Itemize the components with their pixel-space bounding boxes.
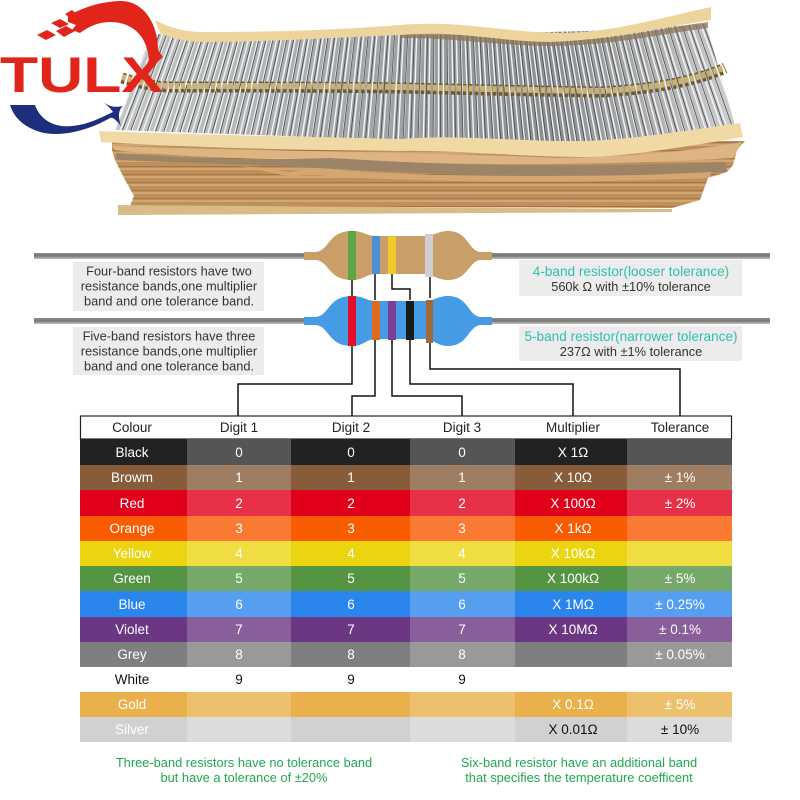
table header: Multiplier: [546, 420, 601, 435]
row: green: [80, 566, 732, 591]
note: three-band resistors: [116, 755, 372, 785]
row: orange: [80, 516, 732, 541]
row: yellow: X 10kΩ: [551, 546, 595, 561]
logo: TULX: [0, 1, 163, 134]
row: grey: 8: [235, 647, 243, 662]
row: white: [115, 672, 466, 687]
row: white: 9: [458, 672, 466, 687]
row: grey: Grey: [117, 647, 147, 662]
resistor: five-band: [304, 296, 492, 346]
connector lines from bands to table: [238, 272, 680, 416]
callout: five-band description: [73, 327, 264, 375]
row: gold: Gold: [118, 697, 146, 712]
resistor: four-band: [304, 231, 492, 280]
row: red: [80, 490, 732, 516]
bottom paper tape: [99, 123, 743, 157]
band: black: [406, 301, 414, 340]
row: brown: X 10Ω: [554, 470, 592, 485]
callout: 4-band resistor value: 4-band resistor(looser tolerance): [533, 264, 729, 279]
band: orange: [372, 301, 380, 340]
callout: four-band description: [73, 262, 264, 311]
row: green: 5: [235, 571, 243, 586]
row: blue: 6: [235, 597, 243, 612]
row: silver: ± 10%: [661, 722, 699, 737]
row: blue: [80, 591, 732, 617]
row: violet: 7: [458, 622, 466, 637]
note: three-band resistors: Three-band resistors have no tolerance band: [116, 755, 372, 770]
row: red: Red: [120, 496, 144, 511]
blue swoosh: [10, 102, 123, 134]
table header: Digit 1: [220, 420, 258, 435]
row: green: 5: [347, 571, 355, 586]
row: white: 9: [347, 672, 355, 687]
row: black: [80, 439, 732, 465]
row: violet: [80, 617, 732, 642]
row: white: White: [115, 672, 149, 687]
row: silver: X 0.01Ω: [548, 722, 598, 737]
callout: 5-band resistor value: [519, 326, 742, 361]
logo wordmark: TULX: [0, 47, 163, 103]
callout: five-band description: resistance bands,one multiplier: [81, 344, 258, 358]
row: yellow: 4: [235, 546, 243, 561]
row: grey: 8: [347, 647, 355, 662]
row: brown: 1: [347, 470, 355, 485]
paper stack: [112, 141, 745, 215]
row: brown: [80, 465, 732, 490]
callout: five-band description: Five-band resistors have three: [83, 328, 255, 344]
note: six-band resistors: Six-band resistor have an additional band: [461, 755, 697, 770]
row: violet: 7: [235, 622, 243, 637]
row: red: 2: [458, 496, 466, 511]
row: gold: X 0.1Ω: [552, 697, 594, 712]
row: brown: ± 1%: [665, 470, 695, 485]
row: blue: ± 0.25%: [655, 597, 705, 612]
row: orange: 3: [458, 521, 466, 536]
row: brown: 1: [458, 470, 466, 485]
resistor leads: [34, 253, 770, 324]
band: red: [348, 296, 356, 346]
callout: four-band description: Four-band resistors have two: [86, 264, 252, 278]
row: orange: 3: [347, 521, 355, 536]
row: yellow: 4: [458, 546, 466, 561]
callout: four-band description: resistance bands,one multiplier: [81, 278, 258, 294]
row: violet: X 10MΩ: [548, 622, 598, 637]
row: silver: Silver: [115, 722, 149, 737]
row: blue: 6: [458, 597, 466, 612]
callout: 4-band resistor value: [519, 260, 742, 296]
callout: five-band description: band and one tolerance band.: [84, 358, 254, 374]
top paper tape: [155, 7, 711, 42]
row: green: Green: [113, 571, 151, 586]
row: grey: ± 0.05%: [655, 647, 705, 662]
row: brown: Browm: [111, 470, 153, 485]
row: red: 2: [235, 496, 243, 511]
row: blue: X 1MΩ: [552, 597, 594, 612]
row: orange: X 1kΩ: [554, 521, 592, 536]
row: orange: 3: [235, 521, 243, 536]
band: violet: [388, 301, 396, 340]
row: yellow: Yellow: [113, 546, 152, 561]
band: green: [348, 231, 356, 280]
callout: 5-band resistor value: 237Ω with ±1% tolerance: [560, 344, 702, 359]
row: red: X 100Ω: [550, 496, 596, 511]
table header: [80, 416, 732, 439]
callout: four-band description: band and one tolerance band.: [84, 294, 254, 308]
row: violet: ± 0.1%: [659, 622, 701, 637]
row: white: 9: [235, 672, 243, 687]
red swoosh: [68, 1, 163, 70]
row: green: 5: [458, 571, 466, 586]
note: six-band resistors: that specifies the temperature coefficent: [465, 770, 693, 785]
row: orange: Orange: [109, 521, 155, 536]
row: green: X 100kΩ: [547, 571, 599, 586]
row: grey: 8: [458, 647, 466, 662]
note: six-band resistors: [461, 755, 697, 785]
band: blue: [372, 236, 380, 274]
note: three-band resistors: but have a tolerance of ±20%: [160, 770, 328, 785]
row: yellow: 4: [347, 546, 355, 561]
checker squares: [37, 10, 78, 40]
callout: 5-band resistor value: 5-band resistor(narrower tolerance): [524, 329, 738, 344]
row: grey: [80, 642, 732, 667]
row: blue: Blue: [118, 597, 146, 612]
row: black: Black: [115, 445, 149, 460]
row: violet: 7: [347, 622, 355, 637]
row: brown: 1: [235, 470, 243, 485]
second tape layer under top tape: [400, 22, 708, 46]
table header: Digit 3: [443, 420, 481, 435]
row: red: ± 2%: [665, 496, 695, 511]
colour code table: [80, 416, 732, 742]
band: silver: [425, 234, 433, 277]
table header: Colour: [112, 420, 152, 435]
photo: resistor strips on paper tape: [99, 7, 745, 215]
callout: 4-band resistor value: 560k Ω with ±10% tolerance: [551, 279, 711, 294]
row: gold: [80, 692, 732, 717]
row: yellow: [80, 541, 732, 566]
row: green: ± 5%: [665, 571, 695, 586]
band: yellow: [388, 236, 396, 274]
table header: Digit 2: [332, 420, 370, 435]
row of resistor bodies: [122, 67, 725, 92]
row: black: X 1Ω: [558, 445, 588, 460]
band: brown: [426, 300, 433, 343]
row: gold: ± 5%: [665, 697, 695, 712]
table header: Tolerance: [651, 420, 709, 435]
row: black: 0: [235, 445, 243, 460]
row: black: 0: [347, 445, 355, 460]
row: red: 2: [347, 496, 355, 511]
row: violet: Violet: [115, 622, 149, 637]
row: blue: 6: [347, 597, 355, 612]
row: black: 0: [458, 445, 466, 460]
wires: [115, 24, 734, 142]
row: silver: [80, 717, 732, 742]
